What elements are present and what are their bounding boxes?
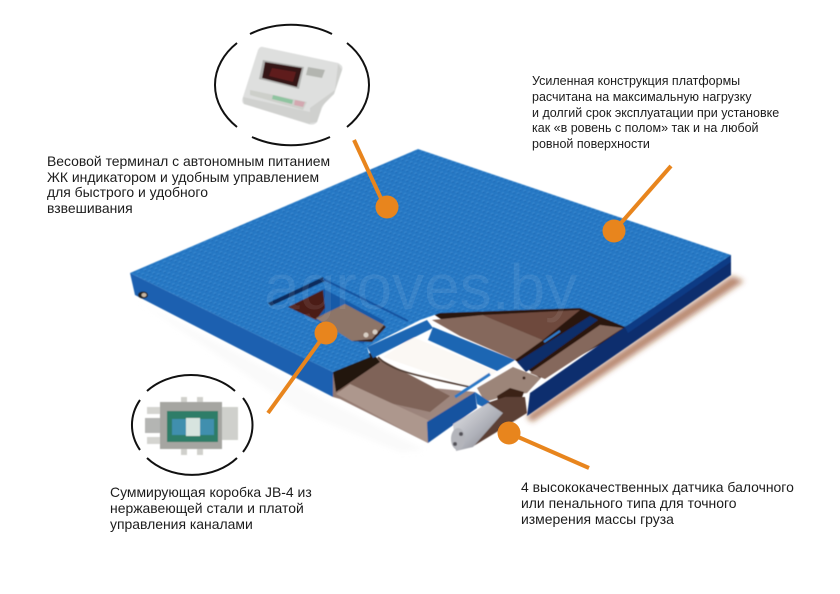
icon: junction box JB-4 [145, 397, 238, 455]
marker: junction box [268, 322, 338, 413]
ellipse frame: junction box [132, 375, 253, 475]
blue cross bar [428, 327, 515, 371]
text: terminal description: Весовой терминал с автономным питанием [47, 153, 330, 169]
text: sensor description: 4 высококачественных датчика балочного [521, 479, 794, 495]
text: terminal description: ЖК индикатором и удобным управлением [47, 169, 319, 185]
right side wall [527, 255, 731, 416]
text: platform description: расчитана на максимальную нагрузку [532, 90, 752, 104]
text: platform description: и долгий срок эксплуатации при установке [532, 106, 779, 120]
ellipse frame: terminal [215, 25, 369, 145]
lower brown tray [333, 358, 475, 443]
navy rails at right compartment [517, 316, 598, 372]
blue band between openings [367, 320, 433, 358]
slot in surface [268, 277, 325, 306]
blue front face of lower tray [427, 392, 477, 443]
text: terminal description: взвешивания [47, 200, 133, 216]
icon: weighing terminal [242, 47, 342, 125]
centre brown beam [477, 367, 541, 402]
text: junction box description: Суммирующая коробка JB-4 из [110, 484, 312, 500]
tray inner wall [333, 358, 450, 412]
text: sensor description: измерения массы груза [521, 511, 674, 527]
upper brown tray [420, 300, 630, 378]
text: terminal description: для быстрого и удобного [47, 184, 208, 200]
frame edge at window [323, 279, 408, 321]
text: platform description: как «в ровень с полом» так и на любой [532, 121, 759, 135]
text: platform description: ровной поверхности [532, 137, 650, 151]
text: junction box description: нержавеющей стали и платой [110, 500, 304, 516]
callout lines and markers [268, 140, 671, 468]
text: platform description: Усиленная конструкция платформы [532, 74, 740, 88]
wire and thin blue strip [378, 357, 470, 387]
centre opening [383, 337, 497, 387]
marker: sensor [498, 422, 589, 468]
text: sensor description: или пенального типа для точного [521, 495, 737, 511]
text: junction box description: управления каналами [110, 516, 253, 532]
platform top surface [130, 149, 731, 372]
left side wall [130, 273, 333, 397]
marker: platform [602, 166, 671, 242]
scale platform illustration [130, 149, 744, 452]
load cell sensor [451, 397, 527, 451]
shadow under platform [140, 276, 744, 452]
watermark: agroves.by [264, 251, 577, 323]
terminal window [288, 289, 385, 344]
marker: terminal [354, 140, 398, 218]
side socket [138, 292, 148, 298]
